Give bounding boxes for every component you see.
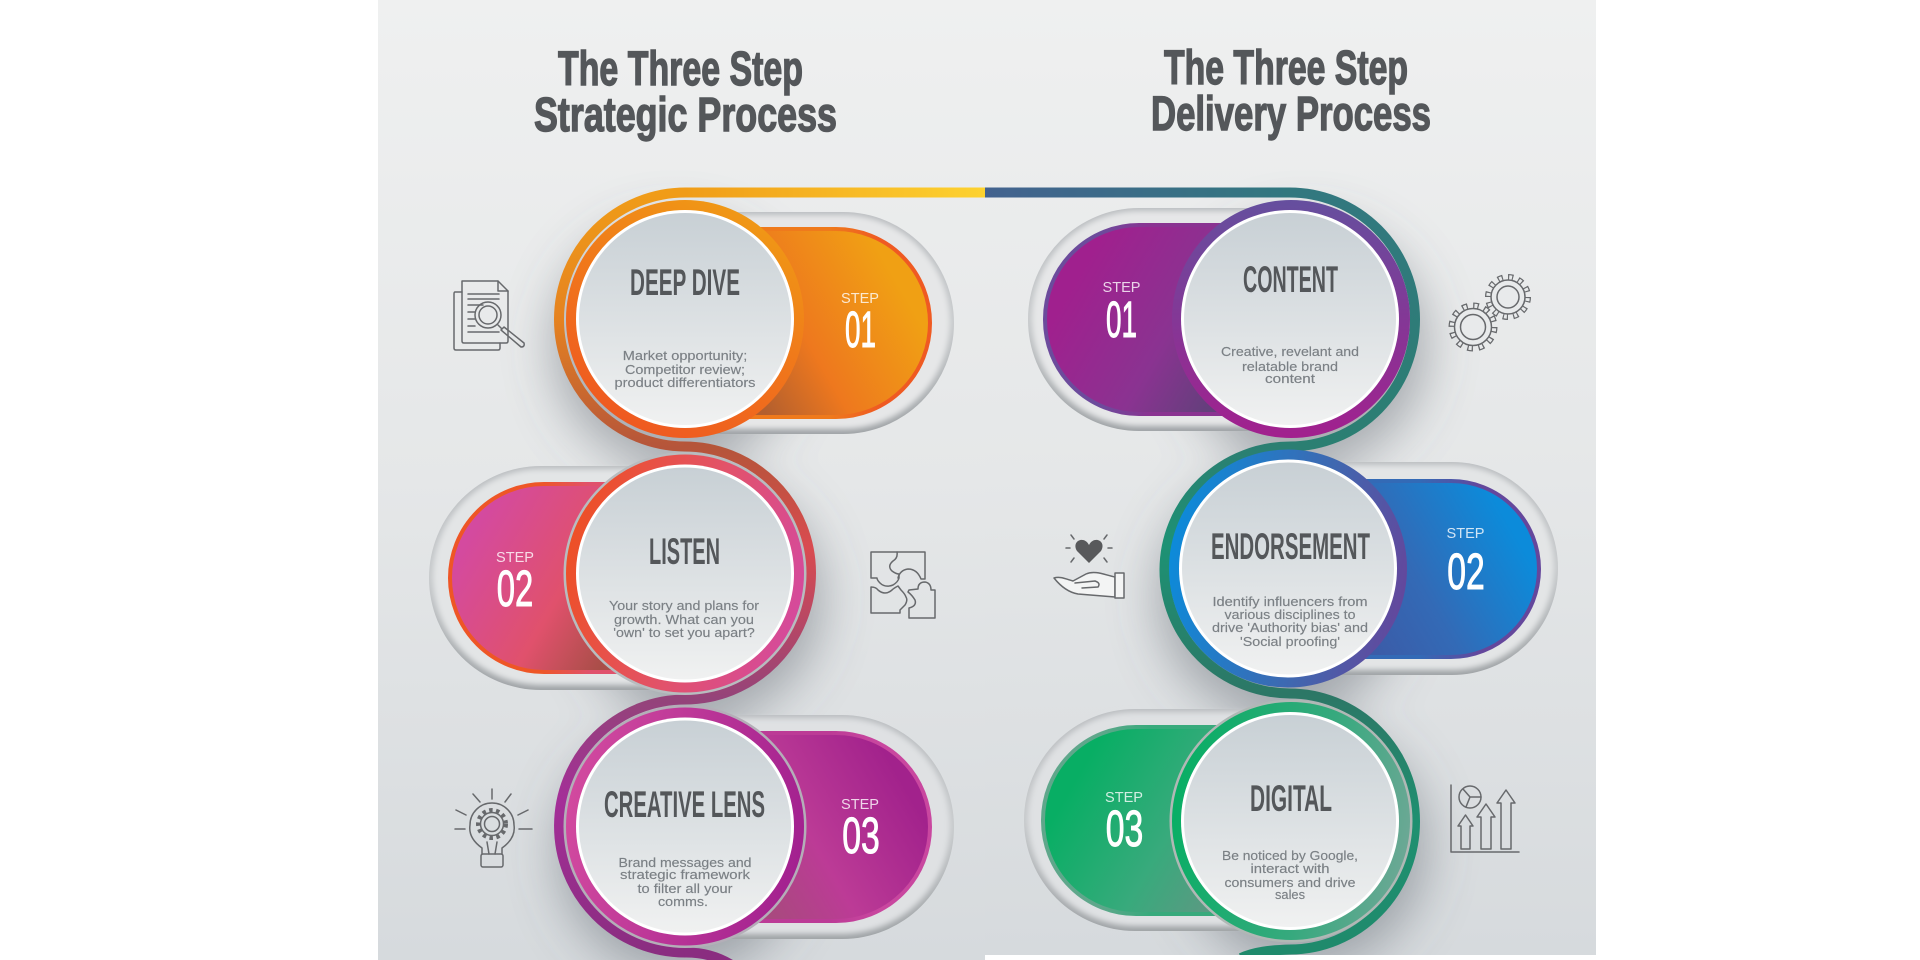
step 2 pill: endorsement <box>1220 462 1558 675</box>
step 3 pill: creative lens <box>600 715 954 939</box>
connector line: delivery path <box>985 192 1415 958</box>
step 1 circle: content <box>1172 200 1410 438</box>
title: delivery process: The Three Step <box>1164 42 1408 95</box>
step 1 circle: content: relatable brand <box>1242 360 1338 374</box>
step 1 circle: deep dive <box>566 200 804 438</box>
step 2 circle: listen: 'own' to set you apart? <box>613 626 755 640</box>
panel: strategic process background <box>378 0 985 960</box>
step 2 circle: endorsement: Identify influencers from <box>1212 595 1368 609</box>
step 2 circle: listen: Your story and plans for <box>609 599 759 613</box>
step 2 circle: endorsement: various disciplines to <box>1224 608 1356 622</box>
step 3 circle: creative lens: Brand messages and <box>618 856 752 870</box>
step label: 01 delivery: 01 <box>1106 291 1137 348</box>
step 1 pill: content <box>1028 208 1360 431</box>
step label: 03 delivery: 03 <box>1106 800 1143 857</box>
step label: 03 strategic: STEP <box>841 797 879 813</box>
step label: 02 strategic: 02 <box>497 560 533 617</box>
step 3 circle: creative lens: strategic framework <box>620 868 751 882</box>
title: strategic process <box>534 43 837 142</box>
step 3 circle: digital <box>1170 700 1412 942</box>
step label: 02 delivery: STEP <box>1446 526 1484 542</box>
step 1 circle: content: Creative, revelant and <box>1221 345 1359 359</box>
step label: 01 strategic <box>841 291 879 358</box>
connector line: strategic path <box>559 192 985 960</box>
step label: 03 strategic: 03 <box>842 807 880 864</box>
icon: gears <box>1452 278 1528 348</box>
step label: 02 strategic <box>496 550 534 617</box>
step 1 circle: deep dive: DEEP DIVE <box>630 262 740 303</box>
step 3 circle: digital: consumers and drive <box>1224 876 1356 890</box>
step label: 01 delivery: STEP <box>1102 280 1140 296</box>
step 2 circle: listen <box>564 452 806 695</box>
title: delivery process <box>1151 42 1431 141</box>
step 2 circle: listen: LISTEN <box>649 531 720 572</box>
step 2 pill: listen <box>429 466 760 690</box>
step 1 circle: deep dive: Competitor review; <box>625 363 745 377</box>
icon: puzzle pieces <box>871 552 935 618</box>
step 3 circle: digital: DIGITAL <box>1250 778 1332 819</box>
title: strategic process: Strategic Process <box>534 89 837 142</box>
step 3 circle: creative lens: to filter all your <box>638 882 732 896</box>
step 3 circle: creative lens <box>564 705 806 948</box>
panel: delivery process background <box>985 0 1596 955</box>
step label: 03 strategic <box>841 797 880 864</box>
step label: 01 strategic: STEP <box>841 291 879 307</box>
step 3 circle: digital: Be noticed by Google, <box>1222 849 1358 863</box>
step label: 02 strategic: STEP <box>496 550 534 566</box>
step 1 circle: deep dive: Market opportunity; <box>623 349 747 363</box>
title: strategic process: The Three Step <box>558 43 803 96</box>
step 3 circle: creative lens: comms. <box>658 895 708 909</box>
icon: growth chart <box>1451 785 1519 852</box>
step 2 circle: endorsement <box>1169 450 1407 688</box>
icon: light bulb with gear <box>455 789 532 867</box>
step 1 pill: deep dive <box>600 212 954 434</box>
step 1 circle: content: CONTENT <box>1243 259 1338 300</box>
step label: 03 delivery: STEP <box>1105 790 1143 806</box>
step label: 01 delivery <box>1102 280 1140 348</box>
icon: heart over open hand <box>1054 535 1124 598</box>
step 2 circle: endorsement: 'Social proofing' <box>1240 635 1340 649</box>
title: delivery process: Delivery Process <box>1151 88 1431 141</box>
soft shadows under circles <box>553 223 1427 960</box>
step label: 03 delivery <box>1105 790 1143 857</box>
step 1 circle: deep dive: product differentiators <box>614 376 756 390</box>
step 2 circle: endorsement: ENDORSEMENT <box>1211 526 1370 567</box>
step 3 circle: creative lens: CREATIVE LENS <box>604 784 765 825</box>
step label: 02 delivery <box>1446 526 1485 600</box>
step 2 circle: listen: growth. What can you <box>614 613 754 627</box>
step 3 circle: digital: sales <box>1275 888 1305 902</box>
step 3 circle: digital: interact with <box>1250 862 1330 876</box>
step 1 circle: content: content <box>1265 372 1316 386</box>
step 2 circle: endorsement: drive 'Authority bias' and <box>1212 621 1368 635</box>
step label: 02 delivery: 02 <box>1447 543 1485 600</box>
step 3 pill: digital <box>1024 709 1370 931</box>
step label: 01 strategic: 01 <box>845 301 876 358</box>
icon: document with magnifier <box>454 281 524 350</box>
